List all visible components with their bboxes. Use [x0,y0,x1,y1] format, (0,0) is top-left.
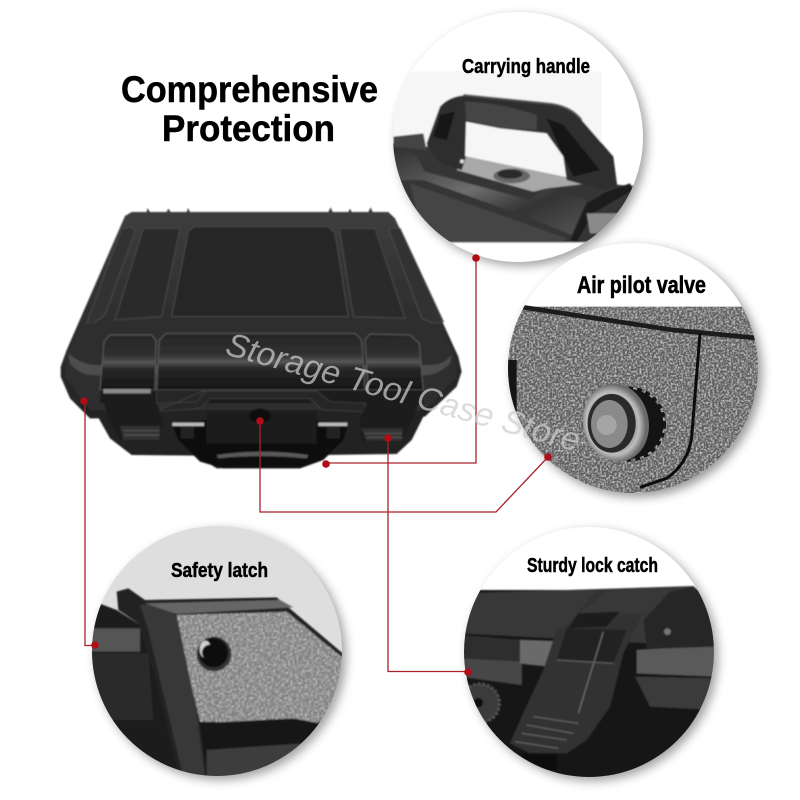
label: Carrying handle [462,56,590,78]
connector: sturdy lock catch [384,434,472,676]
circle shadow [96,530,346,780]
valve knob [626,386,666,462]
latch [570,183,633,242]
circle shadow [468,531,718,781]
button on top [493,169,530,183]
detail photo: valve [508,305,758,493]
watermark: Storage Tool Case Store [222,325,585,459]
handle mount [155,390,365,412]
product photo: black storage case [61,207,462,468]
detail photo: lock catch [460,586,720,780]
screw hole [197,637,231,671]
detail photo: handle [390,72,650,243]
label: Air pilot valve [577,272,706,299]
connector: air pilot valve [256,417,552,512]
title: Protection [162,108,335,149]
panel: air pilot valve [500,243,767,507]
raised frame [116,588,342,762]
label: Safety latch [171,560,268,582]
case lid [61,207,462,418]
side clasps [103,400,163,442]
handle side brackets [172,423,347,426]
air valve on front [249,409,271,423]
title [121,69,378,149]
handle grip [427,95,617,190]
textured panel [177,612,343,724]
connector: safety latch [80,397,99,649]
panel: carrying handle [390,12,650,266]
panel: safety latch [80,526,347,780]
lower case body [96,413,425,468]
label: Sturdy lock catch [527,555,658,577]
carrying handle [172,420,348,468]
detail photo: latch [80,588,347,780]
knob at left [461,684,499,723]
front bumper [65,323,457,410]
catch lever [510,638,629,754]
right bumper [643,587,717,648]
case body [390,143,650,242]
lid seam [100,390,423,403]
title: Comprehensive [121,69,378,110]
connector: carrying handle [322,254,480,468]
panel: sturdy lock catch [460,527,720,781]
lid relief panels [87,227,443,323]
circle shadow [512,247,762,497]
latch blocks on the lid front [100,333,423,390]
circle shadow [397,16,647,266]
